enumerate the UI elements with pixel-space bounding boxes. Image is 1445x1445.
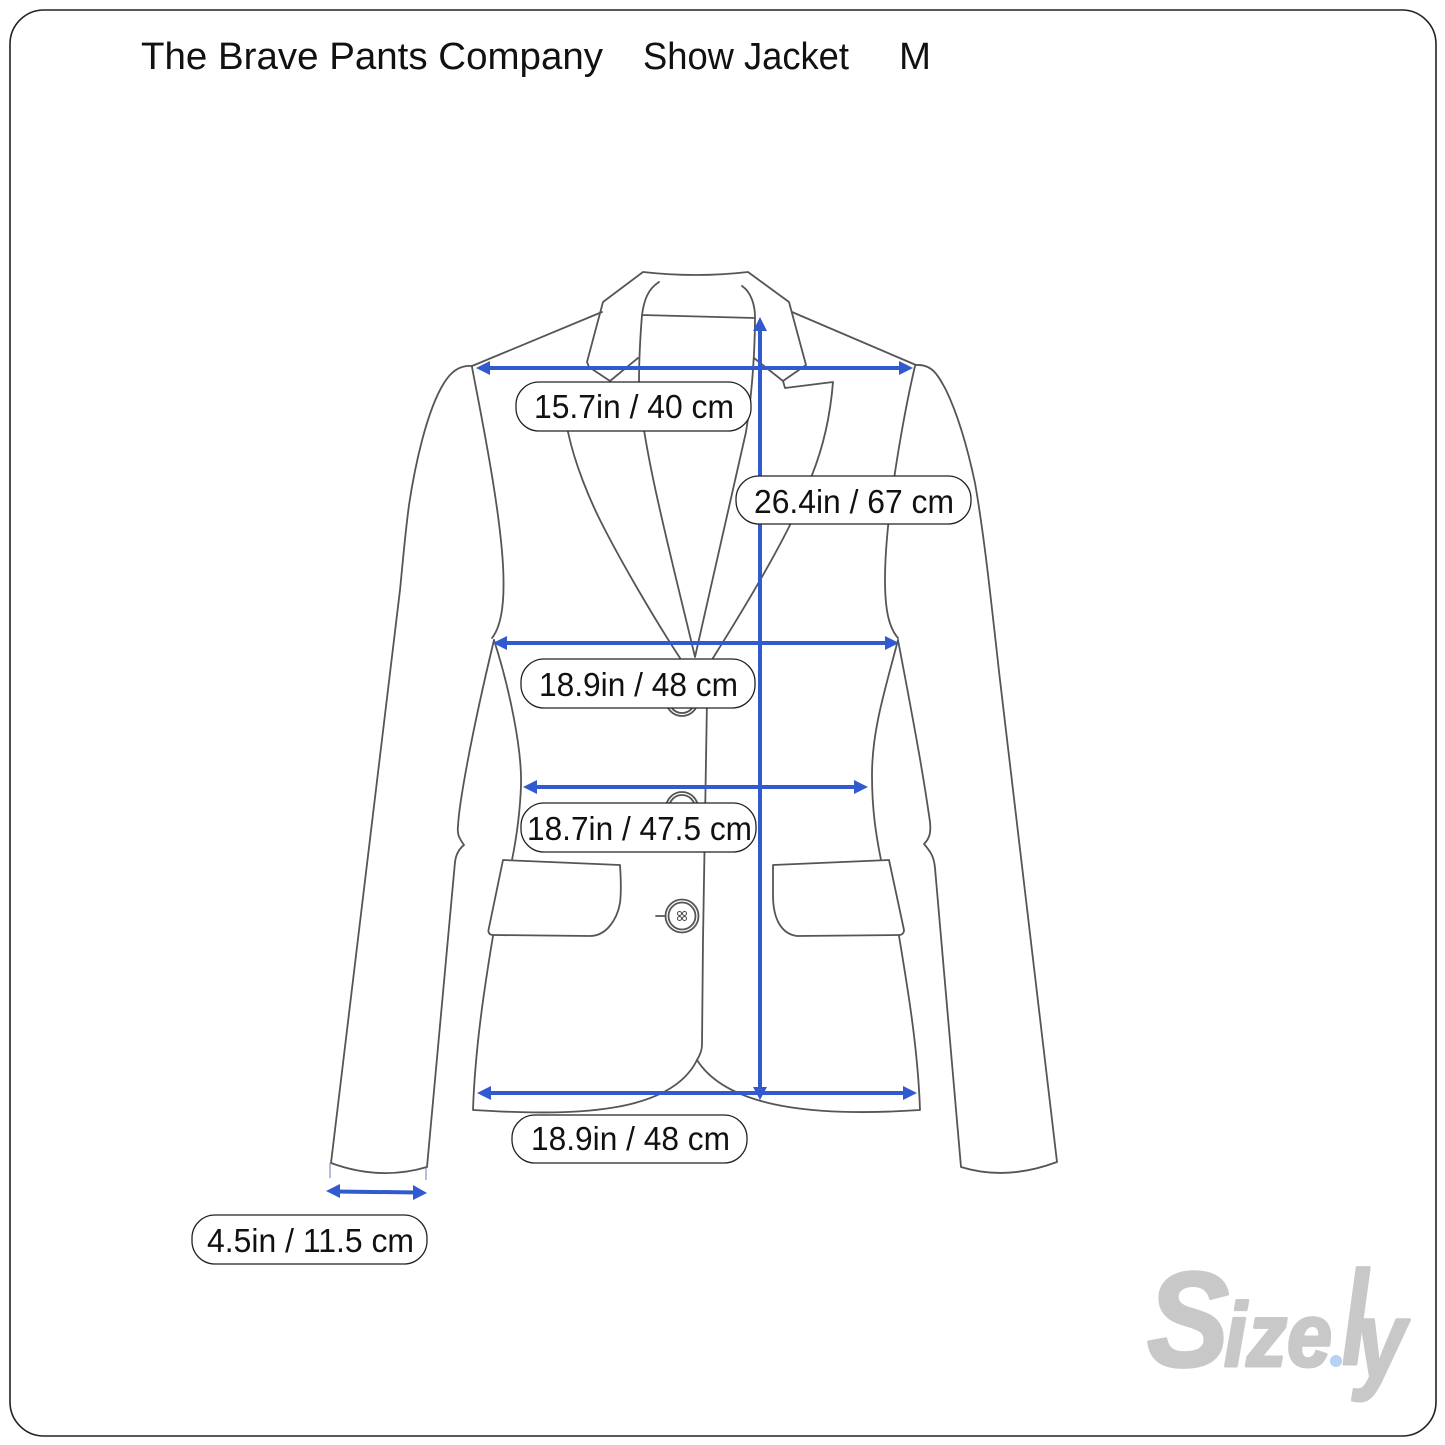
label: waist lower: 18.7in / 47.5 cm bbox=[527, 810, 752, 847]
arrow: length bbox=[753, 317, 767, 1100]
right body side and hem bbox=[697, 640, 920, 1112]
label: length bbox=[736, 476, 971, 524]
front edge bbox=[697, 700, 707, 1060]
right sleeve bbox=[898, 365, 1057, 1173]
lapels bbox=[568, 381, 833, 658]
title: The Brave Pants Company bbox=[141, 36, 603, 78]
cuff ticks bbox=[330, 1163, 426, 1180]
label: chest: 15.7in / 40 cm bbox=[534, 388, 734, 425]
title bbox=[141, 36, 931, 78]
label: chest bbox=[516, 382, 751, 431]
arrow: hem bbox=[477, 1086, 917, 1100]
logo: Size.ly: ize bbox=[1224, 1286, 1332, 1386]
button: upper bbox=[666, 684, 698, 716]
jacket outline drawing bbox=[330, 272, 1057, 1180]
arrow: waist upper bbox=[493, 636, 899, 650]
label: cuff: 4.5in / 11.5 cm bbox=[207, 1222, 414, 1259]
collar bbox=[587, 272, 806, 381]
label: hem bbox=[512, 1115, 747, 1163]
title: M bbox=[899, 36, 931, 78]
label: waist upper bbox=[521, 659, 755, 708]
logo: Size.ly: y bbox=[1352, 1279, 1410, 1402]
neck lines bbox=[639, 282, 755, 657]
logo: Size.ly: S bbox=[1147, 1244, 1229, 1395]
arrow: cuff bbox=[326, 1184, 427, 1200]
shoulders bbox=[472, 312, 916, 366]
arrow: waist lower bbox=[523, 780, 868, 794]
label: cuff bbox=[192, 1215, 427, 1264]
title: Show Jacket bbox=[643, 36, 849, 78]
button: middle bbox=[666, 792, 698, 824]
button: lower bbox=[656, 900, 698, 932]
logo: Size.ly bbox=[1147, 1244, 1410, 1402]
armholes bbox=[472, 367, 504, 638]
logo: Size.ly: l bbox=[1342, 1245, 1370, 1393]
left body side and hem bbox=[473, 640, 697, 1112]
left sleeve bbox=[331, 366, 494, 1173]
label: waist upper: 18.9in / 48 cm bbox=[539, 666, 738, 703]
label: length: 26.4in / 67 cm bbox=[754, 483, 954, 520]
pocket flaps bbox=[488, 860, 621, 936]
arrow: chest bbox=[476, 361, 913, 375]
label: hem: 18.9in / 48 cm bbox=[531, 1120, 730, 1157]
